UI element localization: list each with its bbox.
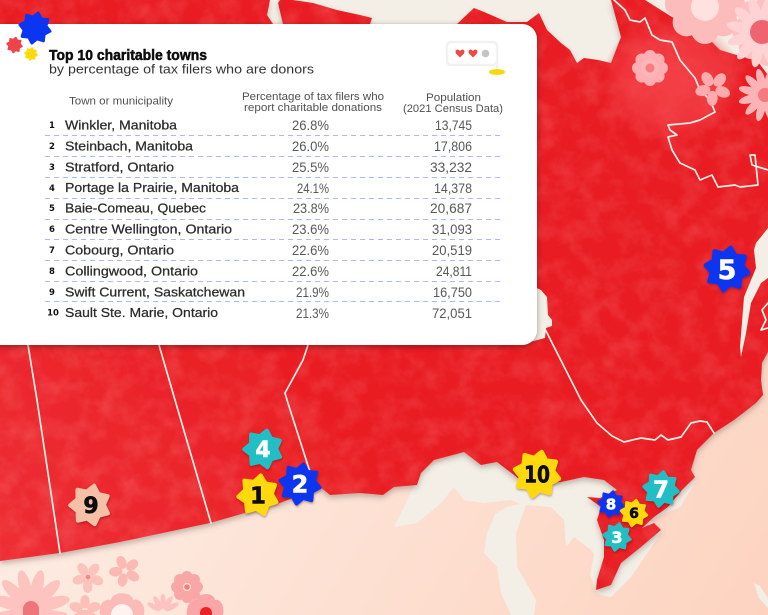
marker 4 — [241, 427, 285, 469]
row 5: 5 — [49, 204, 55, 214]
row 9: Swift Current, Saskatchewan — [65, 284, 245, 300]
row 10: 72,051 — [432, 305, 472, 321]
row 6: Centre Wellington, Ontario — [65, 222, 232, 236]
marker 6 — [619, 498, 649, 528]
row 7 — [49, 242, 472, 258]
row 4: 14,378 — [434, 180, 472, 196]
marker 10: 10 — [524, 462, 550, 488]
table headers: Population — [426, 92, 481, 104]
marker 5 — [702, 244, 752, 294]
St. Lawrence river — [740, 228, 768, 357]
row 4 — [49, 180, 472, 196]
row 9 — [49, 284, 472, 300]
great lakes — [394, 450, 697, 615]
table headers: report charitable donations — [244, 102, 383, 114]
row 1: 13,745 — [435, 117, 472, 133]
small water inlet at lower right — [754, 583, 768, 608]
row 4: Portage la Prairie, Manitoba — [65, 180, 240, 195]
row 10: Sault Ste. Marie, Ontario — [65, 305, 218, 320]
marker 6: 6 — [629, 506, 639, 522]
row 10: 10 — [47, 308, 59, 318]
row 2: 2 — [49, 142, 55, 152]
James Bay inlet — [530, 285, 552, 342]
marker 7: 7 — [653, 478, 669, 504]
row 2: Steinbach, Manitoba — [65, 138, 194, 154]
marker 4: 4 — [255, 438, 271, 463]
table headers — [69, 91, 503, 115]
marker 8 — [596, 489, 626, 519]
row 6 — [49, 221, 472, 237]
row 5: 20,687 — [430, 200, 472, 216]
row 2 — [49, 138, 472, 154]
panel: top 10 table — [0, 10, 537, 345]
marker 2 — [277, 461, 323, 507]
table headers: Percentage of tax filers who — [242, 91, 384, 103]
icon: speech bubble with hearts — [447, 42, 505, 75]
row 8: 24,811 — [436, 263, 472, 279]
marker 3: 3 — [611, 528, 623, 547]
row 1: 26.8% — [292, 117, 329, 133]
row 9: 9 — [49, 288, 55, 298]
row 5: Baie-Comeau, Quebec — [65, 200, 207, 216]
table headers: (2021 Census Data) — [403, 103, 503, 115]
panel background — [0, 24, 537, 345]
row 5 — [49, 200, 472, 216]
row 3: 33,232 — [430, 159, 472, 175]
row 2: 26.0% — [292, 138, 329, 154]
row 6: 31,093 — [432, 221, 472, 237]
row 1: 1 — [49, 121, 55, 131]
row 2: 17,806 — [434, 138, 472, 154]
row 8: 22.6% — [292, 263, 329, 279]
row 10 — [47, 305, 472, 321]
row 5: 23.8% — [293, 200, 329, 216]
flowers: top right — [632, 0, 768, 128]
marker 1 — [236, 473, 280, 515]
row 6: 6 — [49, 225, 55, 235]
row 3: 3 — [49, 163, 55, 173]
flowers: bottom left — [0, 548, 223, 615]
row 1 — [49, 117, 472, 133]
row 1: Winkler, Manitoba — [65, 118, 178, 132]
marker 9: 9 — [83, 494, 99, 519]
marker 1: 1 — [250, 484, 266, 510]
row 4: 4 — [49, 184, 55, 194]
row 3 — [49, 159, 472, 175]
marker 10 — [510, 447, 564, 501]
row 6: 23.6% — [292, 221, 329, 237]
row 7: Cobourg, Ontario — [65, 242, 174, 258]
marker 5: 5 — [718, 255, 736, 286]
marker 8: 8 — [606, 496, 616, 514]
marker 7 — [642, 470, 680, 508]
row 4: 24.1% — [297, 180, 329, 196]
row 8 — [49, 263, 472, 279]
row 9: 16,750 — [433, 284, 472, 300]
row 9: 21.9% — [296, 284, 329, 300]
row 8: Collingwood, Ontario — [65, 264, 198, 278]
row 7: 7 — [49, 246, 55, 256]
row 3: Stratford, Ontario — [65, 160, 174, 174]
row 3: 25.5% — [292, 159, 329, 175]
subtitle: by percentage of tax filers who are donors — [49, 62, 315, 76]
row 10: 21.3% — [296, 305, 329, 321]
row 8: 8 — [49, 267, 55, 277]
decorative stars — [6, 10, 53, 61]
marker 9 — [67, 482, 113, 526]
row 7: 22.6% — [292, 242, 329, 258]
row 7: 20,519 — [432, 242, 472, 258]
table headers: Town or municipality — [69, 96, 174, 108]
row dividers — [45, 136, 501, 302]
marker 3 — [601, 521, 633, 553]
title: Top 10 charitable towns — [49, 48, 207, 64]
marker 2: 2 — [292, 470, 308, 498]
